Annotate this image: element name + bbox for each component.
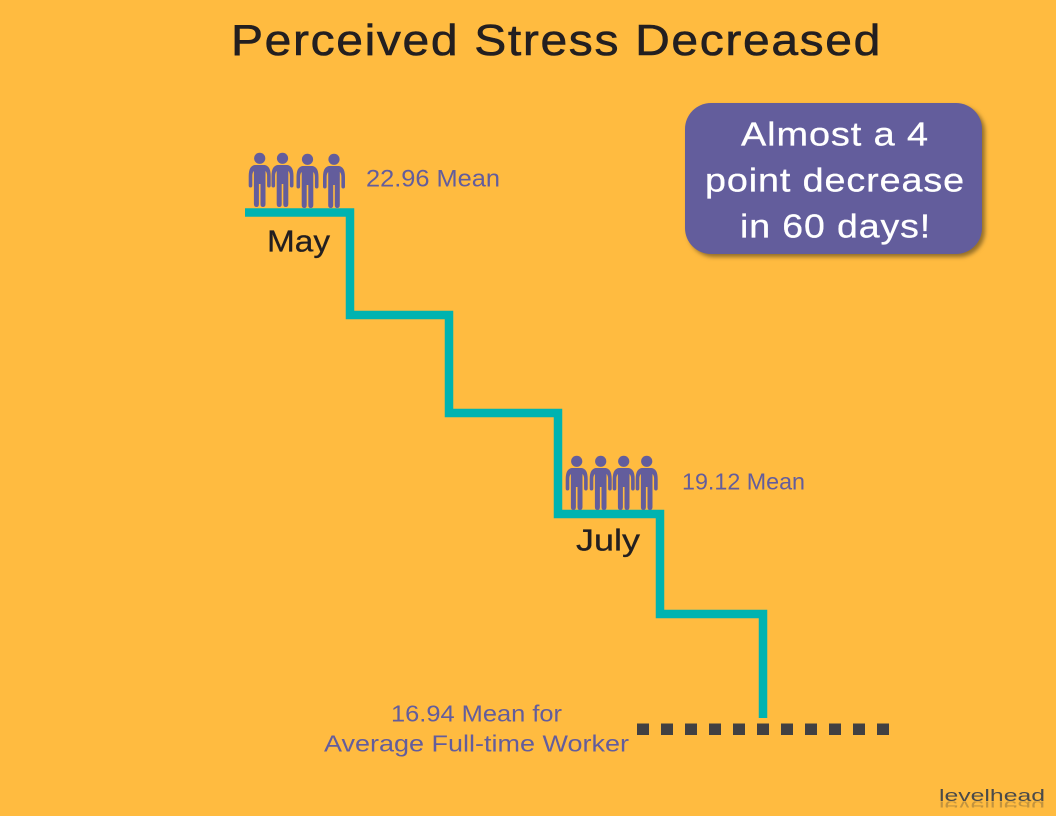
label: average full-time worker mean: 16.94 Mean for xyxy=(391,700,562,726)
callout: almost a 4 point decrease: Almost a 4 xyxy=(741,116,929,154)
icon: July group of people xyxy=(566,456,658,510)
title: Perceived Stress Decreased xyxy=(231,16,882,65)
dotted benchmark line xyxy=(637,724,889,735)
descending staircase line xyxy=(245,212,763,718)
logo: levelhead: levelhead xyxy=(939,797,1045,816)
callout: almost a 4 point decrease: point decrease xyxy=(705,162,965,200)
label: average full-time worker mean: Average Full-time Worker xyxy=(324,730,629,756)
label: May mean: 22.96 Mean xyxy=(366,166,500,193)
label: average full-time worker mean xyxy=(324,700,629,756)
icon: May group of people xyxy=(249,153,345,208)
callout: almost a 4 point decrease: in 60 days! xyxy=(740,208,931,246)
label: May: May xyxy=(267,224,331,259)
label: July: July xyxy=(576,522,641,558)
logo: levelhead: levelhead xyxy=(939,786,1045,805)
label: July mean: 19.12 Mean xyxy=(682,469,805,495)
callout: almost a 4 point decrease xyxy=(685,103,982,254)
logo: levelhead xyxy=(940,789,1044,808)
infographic canvas xyxy=(234,23,1044,808)
